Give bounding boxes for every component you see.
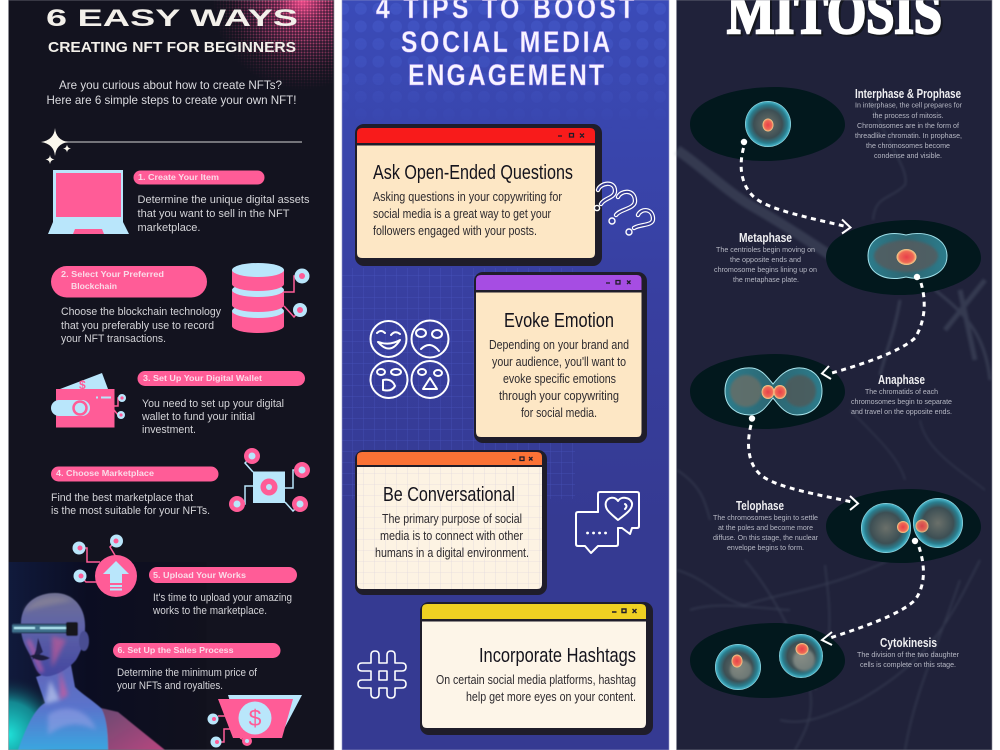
- text: telophase: diffuse. On this stage, the nuclear: [713, 533, 819, 542]
- title: 4 tips: ENGAGEMENT: [408, 58, 604, 92]
- window: Ask Open-Ended Questions: Asking questions in your copywriting for: [373, 189, 563, 204]
- intro text: Here are 6 simple steps to create your own NFT!: [46, 93, 296, 107]
- text: anaphase: [851, 373, 952, 416]
- text: interphase and prophase: Chromosomes are in the form of: [857, 121, 960, 130]
- step 5: works to the marketplace.: [152, 605, 267, 617]
- window: Incorporate Hashtags: [420, 602, 653, 735]
- arrow: to anaphase: [822, 274, 924, 379]
- step 3: 3. Set Up Your Digital Wallet: [143, 373, 262, 383]
- window: Incorporate Hashtags: Incorporate Hashtags: [479, 645, 636, 667]
- window: Evoke Emotion: Evoke Emotion: [504, 310, 614, 332]
- stage: anaphase cell: [690, 354, 845, 429]
- icon: money bag: [208, 695, 302, 748]
- window: Ask Open-Ended Questions: [355, 124, 602, 266]
- icon: chat bubbles: [576, 492, 639, 553]
- text: anaphase: chromosomes begin to separate: [851, 397, 952, 406]
- icon: wallet: [51, 373, 126, 428]
- text: metaphase: The centrioles begin moving on: [716, 245, 815, 254]
- step 2: Choose the blockchain technology: [61, 306, 221, 318]
- step 6: [113, 643, 280, 692]
- panel: social media tips: [342, 0, 669, 750]
- step 1: 1. Create Your Item: [138, 172, 219, 182]
- step 2: Blockchain: [71, 281, 117, 291]
- window: Be Conversational: humans in a digital environment.: [375, 545, 529, 560]
- step 2: 2. Select Your Preferred: [61, 269, 164, 279]
- text: anaphase: Anaphase: [878, 373, 925, 387]
- window: Evoke Emotion: Depending on your brand and: [489, 337, 629, 352]
- stage: metaphase cell: [826, 220, 981, 295]
- step 4: [51, 466, 218, 517]
- text: metaphase: the metaphase plate.: [733, 275, 799, 284]
- sparkle divider: [41, 128, 302, 164]
- step 4: 4. Choose Marketplace: [56, 468, 154, 478]
- text: cytokinesis: The division of the two daughter: [857, 650, 960, 659]
- icon: database: [232, 263, 310, 333]
- text: interphase and prophase: [855, 87, 963, 160]
- step 3: You need to set up your digital: [142, 398, 284, 410]
- step 5: 5. Upload Your Works: [153, 570, 246, 580]
- text: interphase and prophase: the process of mitosis.: [872, 111, 944, 120]
- window: Ask Open-Ended Questions: Ask Open-Ended Questions: [373, 162, 573, 184]
- step 5: [149, 567, 297, 617]
- window: Evoke Emotion: your audience, you'll want to: [492, 354, 626, 369]
- text: telophase: envelope begins to form.: [727, 543, 804, 552]
- step 3: wallet to fund your initial: [141, 411, 255, 423]
- panel: mitosis: [676, 0, 992, 750]
- window: Be Conversational: [355, 450, 547, 595]
- end NFT panel: [8, 0, 334, 750]
- title: 4 tips: SOCIAL MEDIA: [401, 25, 610, 59]
- intro text: Are you curious about how to create NFTs?: [59, 78, 282, 92]
- text: anaphase: and travel on the opposite ends.: [851, 407, 952, 416]
- window: Incorporate Hashtags: help get more eyes on your content.: [466, 689, 636, 704]
- icon: money bag: $: [249, 705, 262, 731]
- stage: interphase cell: [690, 87, 845, 161]
- text: metaphase: Metaphase: [739, 231, 792, 245]
- stage: cytokinesis cells: [690, 623, 845, 698]
- title: 6 easy ways: 6 EASY WAYS: [46, 5, 298, 32]
- background neurons: [677, 100, 990, 750]
- window: Ask Open-Ended Questions: followers engaged with your posts.: [373, 223, 537, 238]
- text: interphase and prophase: condense and visible.: [874, 151, 942, 160]
- text: interphase and prophase: Interphase & Prophase: [855, 87, 961, 101]
- window: Be Conversational: media is to connect with other: [380, 528, 524, 543]
- text: interphase and prophase: the chromosomes become: [866, 141, 950, 150]
- text: interphase and prophase: threadlike chromatin. In prophase,: [855, 131, 962, 140]
- step 4: is the most suitable for your NFTs.: [51, 505, 210, 517]
- text: cytokinesis: Cytokinesis: [880, 636, 937, 650]
- window: Be Conversational: Be Conversational: [383, 484, 515, 506]
- step 1: that you want to sell in the NFT: [138, 208, 290, 220]
- step 1: [134, 170, 310, 234]
- step 3: investment.: [142, 424, 196, 436]
- text: metaphase: [714, 231, 817, 284]
- step 1: Determine the unique digital assets: [138, 194, 310, 206]
- icon: upload: [72, 534, 137, 597]
- intro text: [46, 78, 296, 107]
- window: Incorporate Hashtags: On certain social media platforms, hashtag: [436, 672, 636, 687]
- window: Evoke Emotion: through your copywriting: [499, 388, 619, 403]
- text: telophase: [713, 499, 819, 552]
- arrow: to cytokinesis: [822, 538, 923, 645]
- arrow: to metaphase: [741, 139, 850, 234]
- step 2: that you preferably use to record: [61, 320, 214, 332]
- step 6: Determine the minimum price of: [117, 667, 258, 679]
- stage: telophase cell: [826, 489, 981, 563]
- icon: question marks: [594, 184, 653, 235]
- window: Ask Open-Ended Questions: social media is a great way to get your: [373, 206, 552, 221]
- icon: laptop: [48, 170, 129, 234]
- icon: wallet: $: [79, 378, 86, 392]
- window: Evoke Emotion: evoke specific emotions: [503, 371, 616, 386]
- text: interphase and prophase: In interphase, the cell prepares for: [855, 100, 963, 110]
- panel: NFT guide: [8, 0, 334, 750]
- text: telophase: at the poles and become more: [718, 523, 813, 532]
- illustration: cyber figure with visor: [12, 593, 165, 750]
- text: metaphase: chromosome begins lining up on: [714, 265, 817, 274]
- step 4: Find the best marketplace that: [51, 492, 193, 504]
- window: Evoke Emotion: [474, 272, 647, 443]
- text: telophase: Telophase: [736, 499, 784, 513]
- step 2: your NFT transactions.: [61, 333, 166, 345]
- icon: emotion faces: [370, 320, 448, 398]
- text: anaphase: The chromatids of each: [865, 387, 938, 396]
- window: Be Conversational: The primary purpose of social: [382, 511, 522, 526]
- subtitle: CREATING NFT FOR BEGINNERS: [48, 39, 296, 56]
- icon: hashtag: [358, 651, 406, 698]
- icon: marketplace chip: [229, 448, 310, 512]
- step 2: [51, 266, 221, 345]
- text: cytokinesis: cells is complete on this stage.: [860, 660, 956, 669]
- title: 4 tips: [376, 0, 635, 92]
- step 3: [138, 371, 305, 436]
- text: cytokinesis: [857, 636, 960, 669]
- step 1: marketplace.: [138, 222, 200, 234]
- step 6: your NFTs and royalties.: [117, 680, 223, 692]
- text: telophase: The chromosomes begin to settle: [713, 513, 818, 522]
- step 6: 6. Set Up the Sales Process: [118, 645, 234, 655]
- arrow: to telophase: [749, 415, 858, 510]
- text: metaphase: the opposite ends and: [730, 255, 801, 264]
- window: Evoke Emotion: for social media.: [521, 405, 597, 420]
- step 5: It's time to upload your amazing: [153, 592, 292, 604]
